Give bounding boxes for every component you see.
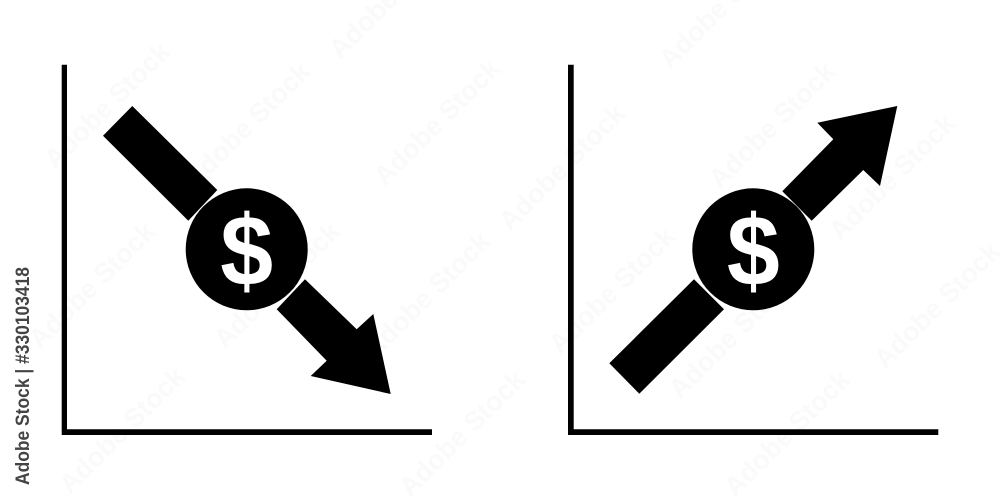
chart axes: left <box>62 65 432 435</box>
watermarks: Adobe Stock <box>358 226 497 364</box>
watermarks: Adobe Stock <box>703 56 842 194</box>
side credit text: Adobe Stock | #330103418 <box>12 267 34 485</box>
chart axes: right <box>568 65 938 435</box>
watermarks: Adobe Stock <box>663 266 802 404</box>
watermarks: Adobe Stock <box>53 361 192 499</box>
icon: dollar coin left: $ <box>220 195 273 307</box>
icon: dollar coin right <box>692 188 814 310</box>
watermarks: Adobe Stock <box>393 364 532 500</box>
watermarks: Adobe Stock <box>23 216 162 354</box>
panel: rising dollar chart <box>568 65 938 435</box>
arrow: downward trend <box>103 106 391 394</box>
watermarks: Adobe Stock <box>493 98 632 236</box>
watermarks: Adobe Stock <box>718 364 857 500</box>
arrow: upward trend <box>609 106 897 394</box>
watermarks: Adobe Stock <box>368 53 507 191</box>
watermarks: Adobe Stock <box>38 36 177 174</box>
watermarks: Adobe Stock <box>543 221 682 359</box>
watermarks: Adobe Stock <box>208 216 347 354</box>
watermarks: Adobe Stock <box>823 108 962 246</box>
watermarks: Adobe Stock <box>178 56 317 194</box>
icon: dollar coin right: $ <box>727 195 780 307</box>
panel: falling dollar chart <box>62 65 432 435</box>
icon: dollar coin left <box>186 188 308 310</box>
